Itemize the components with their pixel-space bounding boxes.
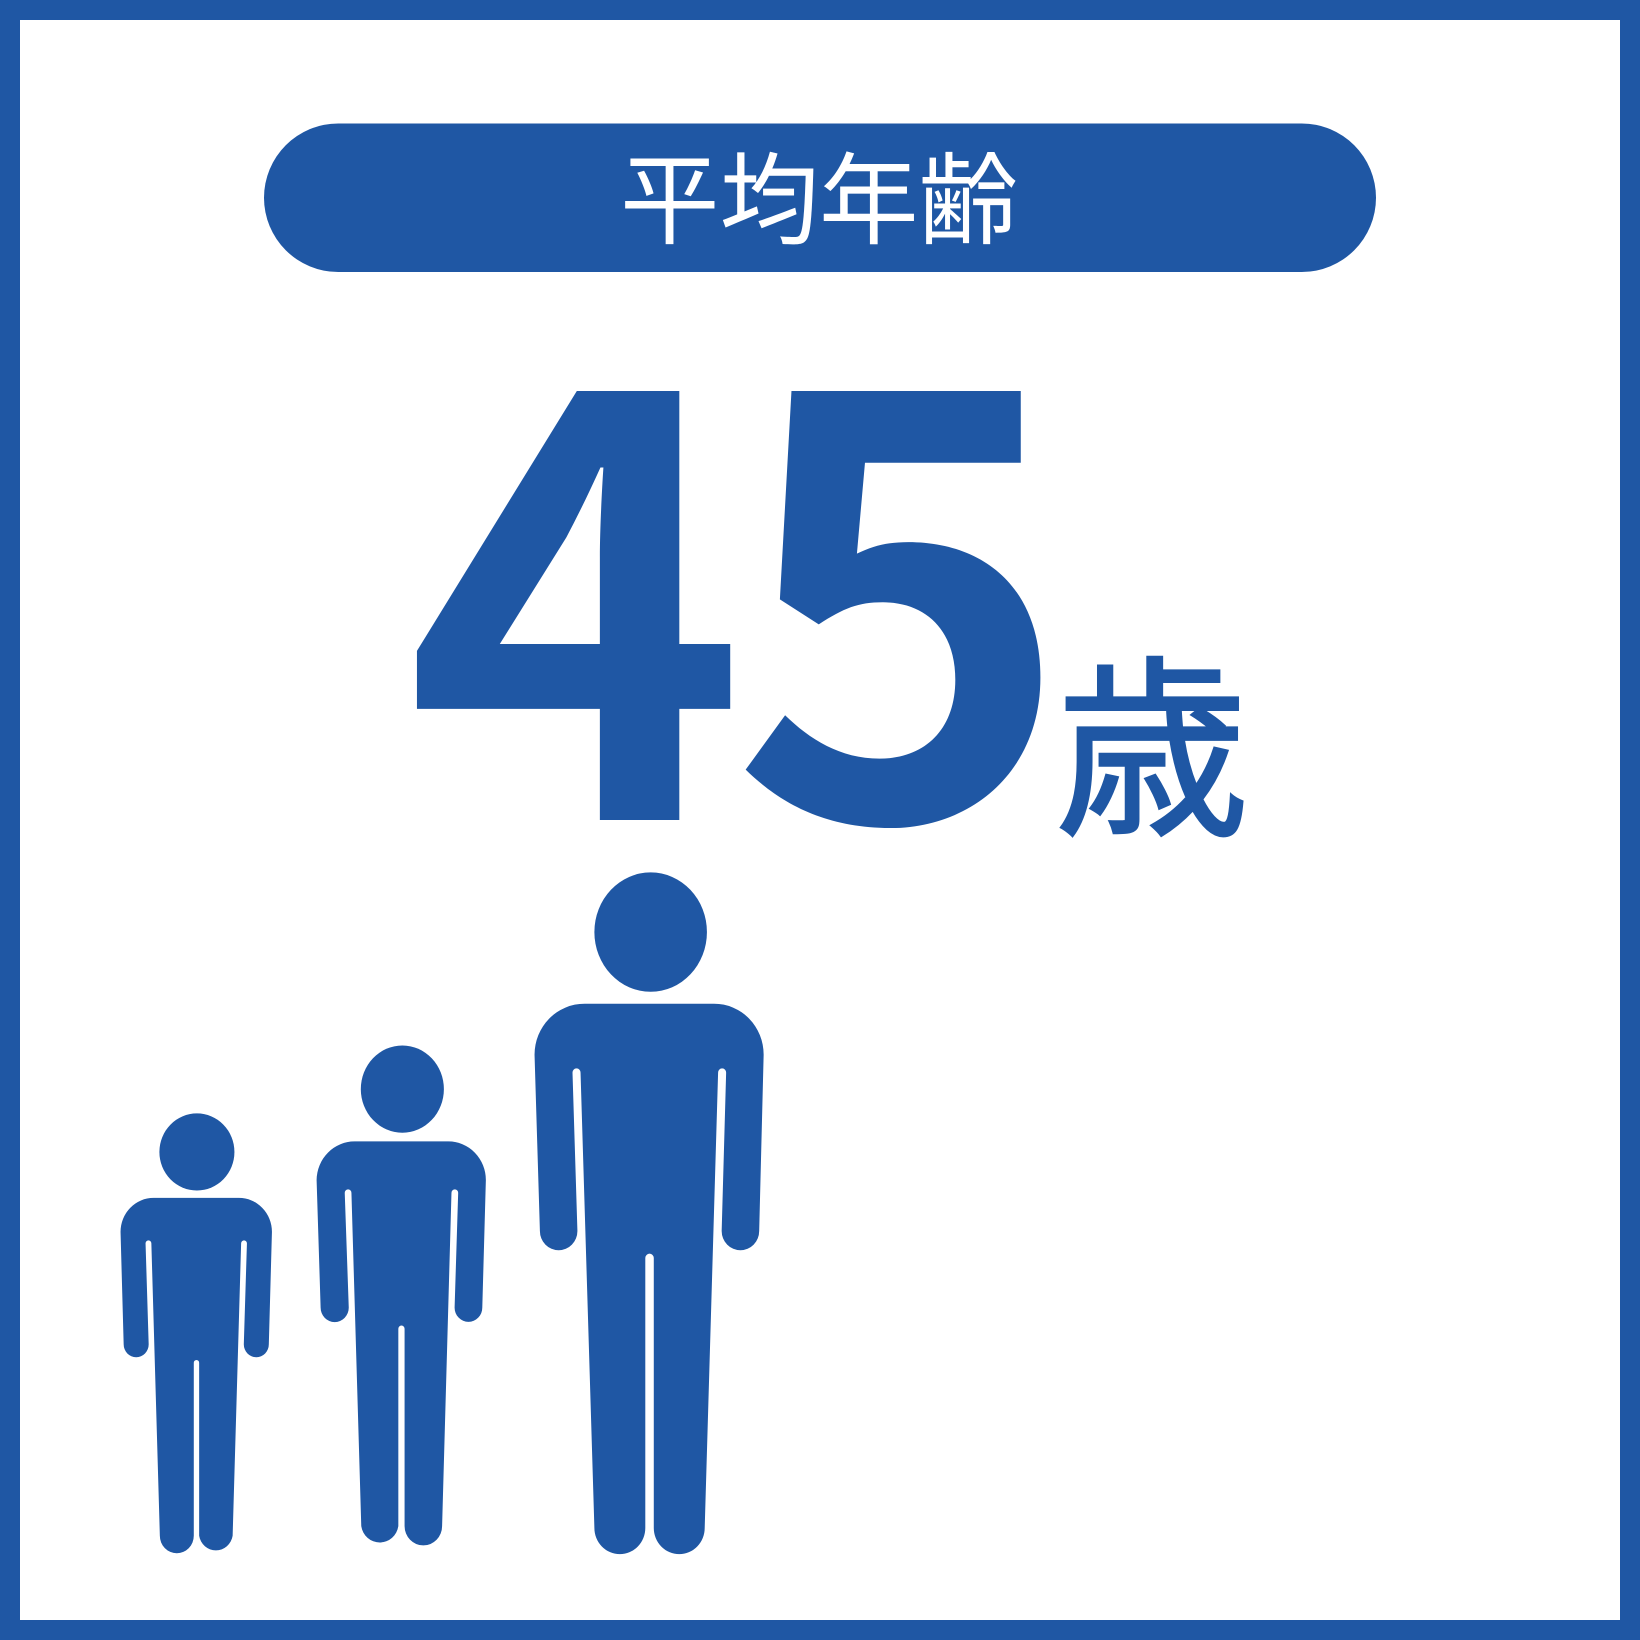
- icon: large person: [535, 872, 764, 1554]
- big number: 45: [405, 148, 1072, 987]
- big number: 45: 5: [731, 148, 1072, 987]
- icon: medium person: [317, 1045, 486, 1545]
- icon: small person: [121, 1113, 272, 1553]
- pill background: [264, 124, 1376, 272]
- figures: three people growing in height: [121, 872, 764, 1554]
- heading pill: average age: [264, 120, 1376, 272]
- unit: years old: 歳: [1055, 595, 1249, 876]
- big number: 45: 4: [405, 148, 746, 987]
- heading text: 平均年齢: [620, 120, 1018, 265]
